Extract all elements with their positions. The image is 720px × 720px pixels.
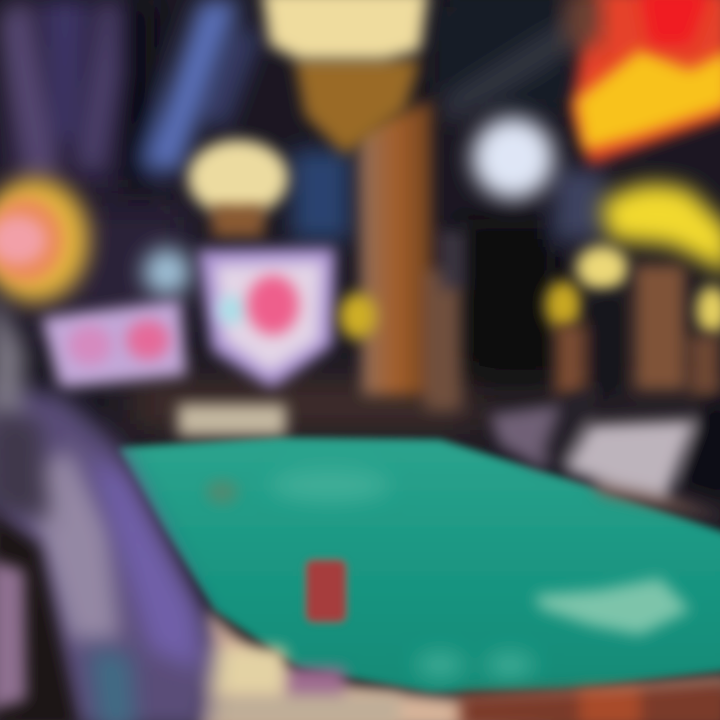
wooden column [358,100,465,410]
yellow lights right [545,184,720,334]
round white light [472,117,554,199]
small blue light [143,248,191,296]
top lamp [262,0,428,155]
felt highlights [270,469,534,677]
bottom table edge [195,648,720,720]
neon sign top right [565,0,720,165]
game table felt [118,438,720,720]
group: left wall and mid-room shadow [0,200,720,430]
group: ceiling lights and stripes [0,0,620,395]
right columns [555,265,720,395]
back sign beige [178,404,286,436]
chip stack red [306,560,346,622]
table marking [535,578,690,635]
middle lamp [188,140,288,237]
chairs and players right [490,385,720,520]
chip small [206,480,238,504]
heart screen center [198,248,335,388]
pink screen left [42,300,186,388]
yellow bulb [339,293,377,339]
neon circle sign left [0,178,89,302]
person in foreground left [0,290,215,720]
